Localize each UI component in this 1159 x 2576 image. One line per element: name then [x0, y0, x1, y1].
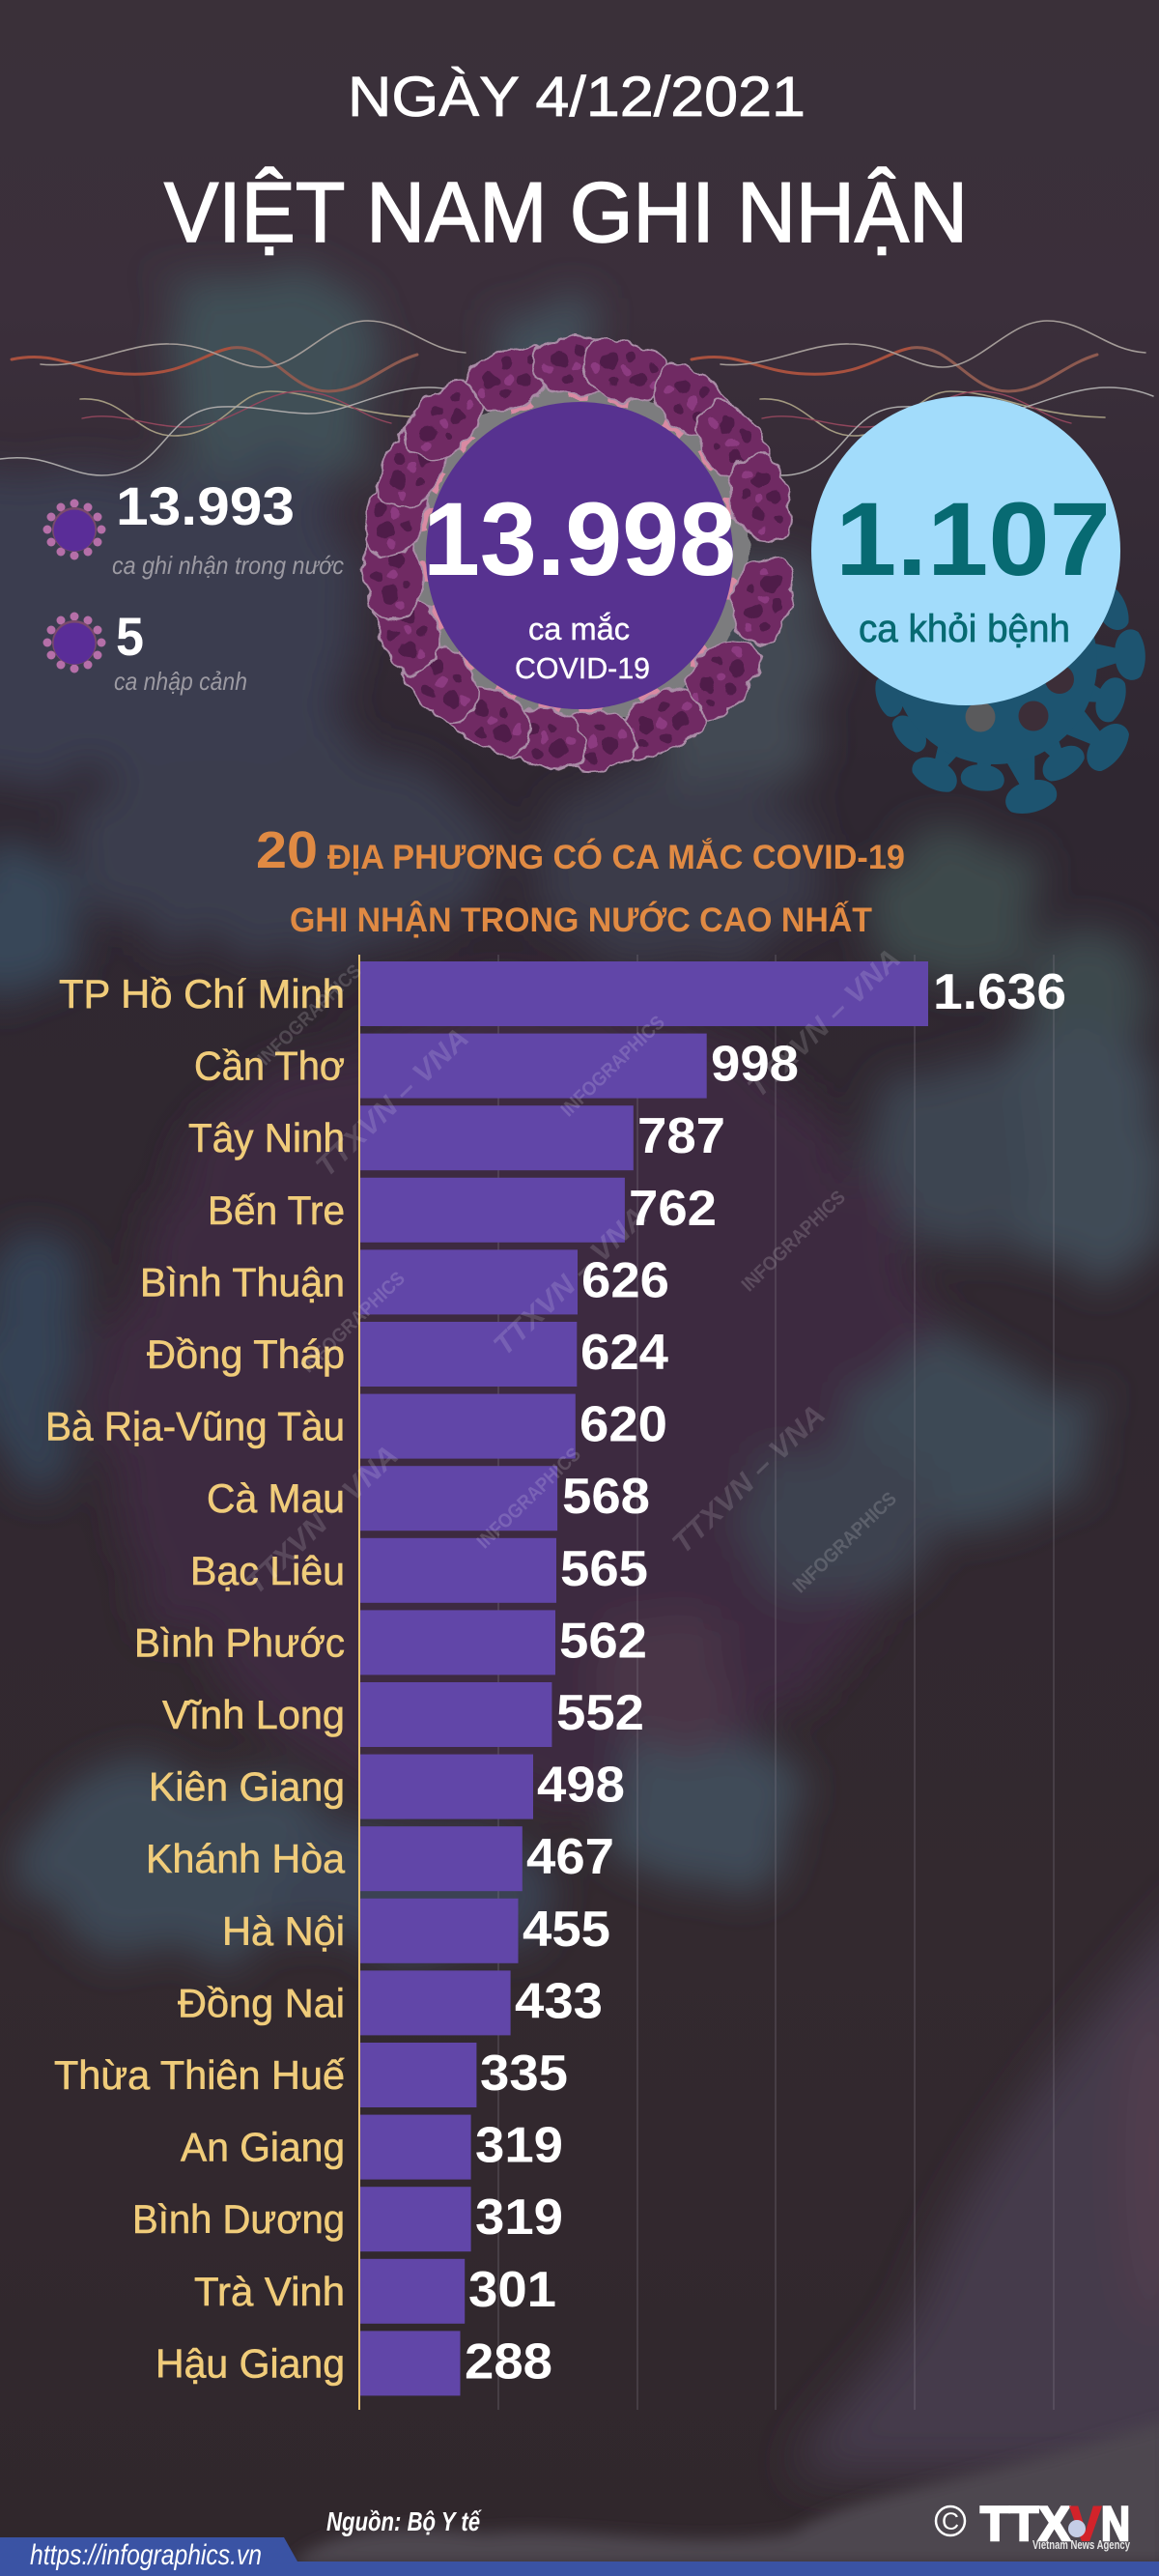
row: Bà Rịa-Vũng Tàu: Bà Rịa-Vũng Tàu	[45, 1404, 345, 1449]
logo: TTXVN: N	[1101, 2497, 1130, 2551]
icon: small virus	[42, 499, 106, 560]
row: Thừa Thiên Huế: 335	[480, 2046, 568, 2102]
row: Hậu Giang: Hậu Giang	[155, 2340, 345, 2386]
row: TP Hồ Chí Minh: TP Hồ Chí Minh	[59, 971, 345, 1016]
footer url: https://infographics.vn	[30, 2539, 262, 2571]
logo: TTXVN: C	[942, 2508, 959, 2535]
row: Trà Vinh: Trà Vinh	[194, 2269, 345, 2314]
row: Tây Ninh: Tây Ninh	[188, 1115, 345, 1160]
title: date: NGÀY 4/12/2021	[348, 66, 806, 129]
row: Trà Vinh: 301	[468, 2262, 556, 2318]
row: Kiên Giang	[149, 1755, 625, 1819]
row: An Giang: An Giang	[181, 2125, 345, 2170]
row: Vĩnh Long	[162, 1682, 644, 1747]
row: Bình Thuận: 626	[581, 1252, 669, 1308]
logo: TTXVN	[936, 2497, 1131, 2552]
panel: recovered circle	[811, 396, 1120, 705]
footer bar	[0, 2537, 1159, 2576]
row: Hà Nội	[222, 1899, 610, 1963]
row: Bến Tre: 762	[629, 1181, 717, 1237]
row: Kiên Giang: Kiên Giang	[149, 1764, 345, 1810]
row: Hà Nội: 455	[523, 1902, 610, 1958]
row: Trà Vinh	[194, 2259, 556, 2324]
row: Kiên Giang: 498	[537, 1758, 625, 1814]
row: Hậu Giang: 288	[465, 2333, 552, 2390]
row: An Giang	[181, 2115, 563, 2180]
chart heading	[256, 821, 905, 939]
watermarks: TTXVN – VNA	[488, 1201, 653, 1362]
watermarks: INFOGRAPHICS	[297, 1268, 410, 1377]
icon: blue virus	[871, 559, 1146, 818]
label: domestic: ca ghi nhận trong nước	[112, 551, 344, 580]
row: Khánh Hòa	[146, 1826, 614, 1891]
number: 5: 5	[116, 606, 144, 667]
label: imported: ca nhập cảnh	[114, 667, 247, 696]
row: Bạc Liêu: Bạc Liêu	[190, 1548, 345, 1593]
row: Bình Dương: Bình Dương	[132, 2196, 345, 2242]
row: Đồng Nai	[178, 1970, 603, 2035]
row: Thừa Thiên Huế	[54, 2043, 568, 2107]
row: Bình Phước: 562	[559, 1613, 647, 1669]
row: Cần Thơ	[194, 1034, 799, 1099]
row: Đồng Nai: 433	[515, 1973, 603, 2029]
label: ca mắc: ca mắc	[528, 612, 630, 646]
row: Cà Mau: Cà Mau	[207, 1475, 345, 1521]
label: ca khỏi bệnh: ca khỏi bệnh	[859, 608, 1070, 650]
chart heading: GHI NHẬN TRONG NƯỚC CAO NHẤT	[290, 901, 872, 939]
row: Bạc Liêu: 565	[560, 1541, 648, 1597]
chart heading: ĐỊA PHƯƠNG CÓ CA MẮC COVID-19	[327, 838, 905, 876]
title: main heading: VIỆT NAM GHI NHẬN	[164, 164, 968, 260]
chart: bar chart of 20 localities	[45, 955, 1066, 2410]
chart heading: 20	[256, 821, 318, 879]
label: COVID-19: COVID-19	[515, 651, 650, 685]
decorative waves left	[0, 321, 473, 475]
stat: domestic cases	[42, 475, 344, 580]
row: Thừa Thiên Huế: Thừa Thiên Huế	[54, 2052, 345, 2098]
row: Bình Dương	[132, 2187, 563, 2251]
row: Khánh Hòa: Khánh Hòa	[146, 1836, 346, 1881]
row: Cà Mau	[207, 1466, 650, 1531]
row: TP Hồ Chí Minh	[59, 961, 1066, 1026]
watermarks: TTXVN – VNA	[742, 943, 907, 1104]
row: Bình Thuận: Bình Thuận	[140, 1259, 345, 1304]
row: Đồng Tháp: Đồng Tháp	[147, 1331, 345, 1377]
watermarks: INFOGRAPHICS	[557, 1012, 669, 1121]
row: Tây Ninh	[188, 1105, 725, 1170]
row: Bà Rịa-Vũng Tàu: 620	[580, 1397, 667, 1453]
row: Vĩnh Long: 552	[556, 1685, 644, 1741]
row: Đồng Tháp	[147, 1322, 668, 1387]
row: Hà Nội: Hà Nội	[222, 1908, 345, 1954]
source text: Nguồn: Bộ Y tế	[326, 2506, 482, 2536]
row: Khánh Hòa: 467	[526, 1829, 614, 1885]
row: Cần Thơ: Cần Thơ	[194, 1044, 345, 1089]
number: total cases: 13.998	[423, 480, 736, 597]
row: Cần Thơ: 998	[711, 1037, 799, 1093]
watermarks: INFOGRAPHICS	[254, 960, 366, 1070]
watermarks: INFOGRAPHICS	[473, 1444, 585, 1553]
logo: TTXVN: TTX	[980, 2497, 1070, 2551]
number: recovered: 1.107	[835, 480, 1111, 597]
row: Bến Tre	[208, 1178, 717, 1243]
row: An Giang: 319	[475, 2118, 563, 2174]
row: TP Hồ Chí Minh: 1.636	[933, 964, 1066, 1020]
row: Bình Thuận	[140, 1249, 669, 1314]
decorative waves right	[680, 321, 1153, 475]
row: Đồng Tháp: 624	[580, 1325, 668, 1381]
watermarks	[240, 943, 907, 1601]
watermarks: TTXVN – VNA	[666, 1399, 832, 1560]
row: Hậu Giang	[155, 2331, 552, 2395]
icon: small virus	[42, 613, 106, 673]
watermarks: TTXVN – VNA	[310, 1022, 475, 1184]
panel: total cases circle	[423, 402, 736, 709]
row: Bình Phước: Bình Phước	[134, 1619, 345, 1665]
watermarks: TTXVN – VNA	[240, 1440, 405, 1601]
row: Bà Rịa-Vũng Tàu	[45, 1394, 667, 1459]
row: Tây Ninh: 787	[637, 1108, 725, 1164]
row: Bình Phước	[134, 1610, 647, 1674]
watermarks: INFOGRAPHICS	[789, 1488, 901, 1597]
watermarks: INFOGRAPHICS	[738, 1187, 850, 1296]
row: Bạc Liêu	[190, 1538, 648, 1603]
logo: TTXVN: V	[1070, 2497, 1102, 2551]
row: Đồng Nai: Đồng Nai	[178, 1980, 345, 2025]
row: Cà Mau: 568	[562, 1469, 650, 1525]
stat: imported cases	[42, 606, 247, 696]
number: 13.993: 13.993	[116, 475, 295, 536]
row: Bình Dương: 319	[475, 2190, 563, 2246]
row: Bến Tre: Bến Tre	[208, 1188, 345, 1233]
row: Vĩnh Long: Vĩnh Long	[162, 1692, 345, 1737]
icon: large coronavirus	[357, 331, 802, 776]
